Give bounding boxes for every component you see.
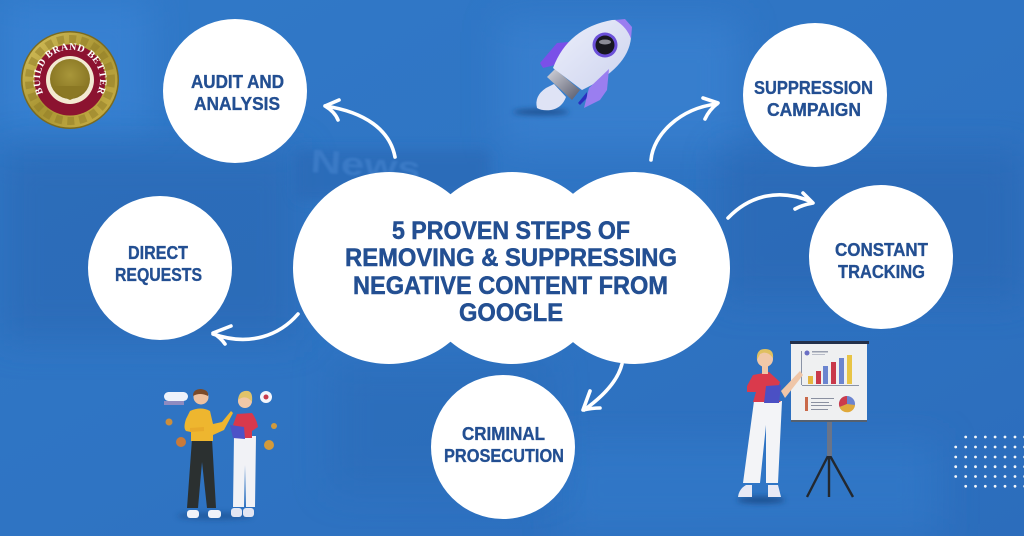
arrow: to criminal prosecution [583,364,622,410]
step: suppression campaign [743,23,887,167]
coins [166,418,277,450]
step: audit and analysis: AUDIT AND [191,72,284,92]
easel [807,422,853,497]
logo badge: BUILD BRAND BETTER [33,43,107,96]
legend and pie chart [805,396,855,412]
people illustration [164,389,277,520]
step: direct requests: DIRECT [128,243,188,263]
arrow: to audit and analysis [325,100,395,157]
central cloud with title [293,172,730,364]
step: direct requests: REQUESTS [115,265,202,285]
title: REMOVING & SUPPRESSING [345,244,677,272]
man [184,389,233,518]
step: constant tracking [809,185,953,329]
woman [738,349,803,497]
step: criminal prosecution [431,375,575,519]
title [345,217,677,327]
step: constant tracking: CONSTANT [835,240,928,260]
step: criminal prosecution: PROSECUTION [444,446,564,466]
step: suppression campaign: SUPPRESSION [754,78,873,98]
step: audit and analysis [163,19,307,163]
faint news headline in background: News [310,143,422,187]
arrow: to constant tracking [728,193,813,218]
title: 5 PROVEN STEPS OF [392,217,630,245]
step: audit and analysis: ANALYSIS [194,94,280,114]
decorative dot grid [954,436,1024,488]
arrow: to suppression campaign [651,98,718,160]
title: NEGATIVE CONTENT FROM [353,272,668,300]
arrow: to direct requests [213,314,298,344]
chat bubble [164,392,188,405]
step: constant tracking: TRACKING [838,262,925,282]
step: direct requests [88,196,232,340]
title: GOOGLE [459,299,563,327]
presenter with chart board illustration [737,341,869,504]
step: suppression campaign: CAMPAIGN [767,100,861,120]
logo badge [21,31,119,129]
rocket illustration [513,19,632,115]
bar chart [801,350,859,386]
heart bubble [260,391,272,403]
woman [230,391,258,517]
chart board [790,341,869,422]
step: criminal prosecution: CRIMINAL [462,424,545,444]
